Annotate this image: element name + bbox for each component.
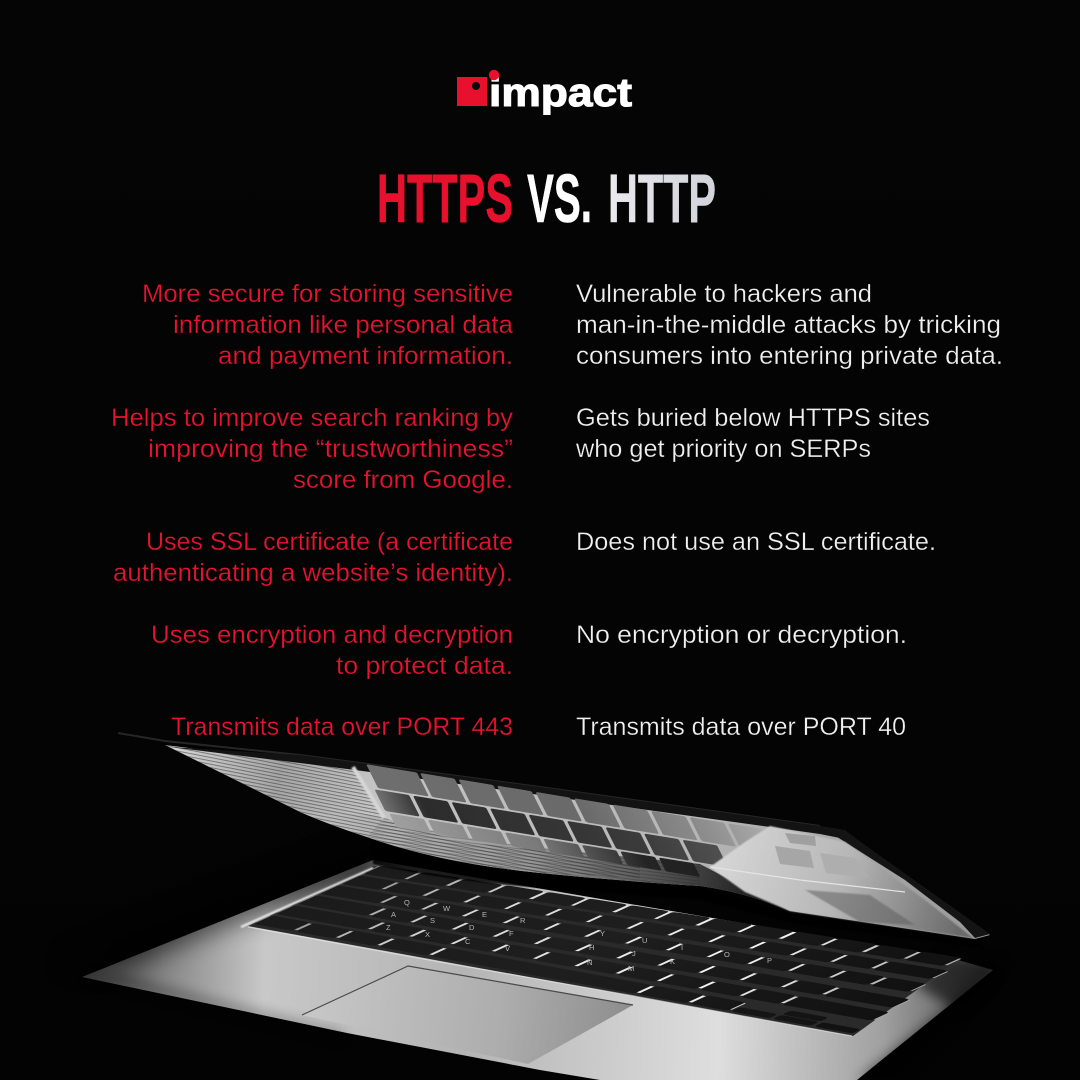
HTTP point: ranking: who get priority on SERPs: [575, 435, 871, 463]
key legends: X: [425, 930, 430, 939]
lid glare panel: [710, 826, 973, 938]
key legends: Q: [404, 898, 410, 907]
HTTP point: encryption: No encryption or decryption.: [576, 621, 907, 649]
HTTPS point: ranking: improving the “trustworthiness”: [148, 435, 513, 463]
shadow under lid: [372, 840, 985, 948]
HTTPS point: security: [142, 280, 513, 370]
key legends: Z: [386, 923, 391, 932]
laptop trackpad: [302, 966, 633, 1064]
HTTP point: port: Transmits data over PORT 40: [576, 713, 906, 741]
key row: numbers: [340, 875, 950, 979]
key row: QWERTY: [318, 885, 928, 992]
laptop base deck: [60, 845, 1005, 1080]
HTTPS point: ranking: [111, 404, 513, 494]
key legends: I: [681, 943, 683, 952]
lid lower lip reflection: [300, 812, 790, 911]
HTTPS point: SSL: Uses SSL certificate (a certificate: [146, 528, 513, 556]
logo wordmark: impact: [489, 71, 632, 115]
key legends: H: [589, 943, 594, 952]
HTTP point: vulnerability: man-in-the-middle attacks by tricking: [576, 311, 1001, 339]
column: HTTPS points: [111, 280, 513, 741]
lid stripes left: [165, 745, 640, 878]
key legends: N: [587, 958, 592, 967]
laptop photo illustration: [60, 733, 1005, 1080]
icon: red square with dot: [457, 77, 487, 106]
key row: space bar and arrows: [252, 915, 870, 1033]
HTTPS point: security: information like personal data: [173, 311, 513, 339]
lid surface: [165, 745, 990, 939]
HTTPS point: security: and payment information.: [218, 342, 513, 370]
key legends: C: [465, 937, 471, 946]
icon: red dot above i: [489, 70, 499, 80]
key legends: S: [430, 916, 435, 925]
title: HTTPS: HTTPS: [377, 160, 513, 237]
reflected key row 3: [389, 813, 700, 877]
HTTP point: ranking: [575, 404, 930, 463]
HTTPS point: ranking: Helps to improve search ranking by: [111, 404, 513, 432]
key legends: F: [509, 929, 514, 938]
key legends: [386, 898, 772, 973]
title: [377, 160, 716, 237]
HTTP point: ranking: Gets buried below HTTPS sites: [576, 404, 930, 432]
HTTPS point: encryption: [151, 621, 513, 680]
key legends: P: [767, 956, 772, 965]
lid side bezel: [820, 826, 990, 938]
HTTP point: SSL: Does not use an SSL certificate.: [576, 528, 936, 556]
HTTPS point: SSL: [113, 528, 513, 587]
HTTPS point: port: Transmits data over PORT 443: [171, 713, 513, 741]
key legends: K: [670, 957, 675, 966]
HTTPS point: security: More secure for storing sensitive: [142, 280, 513, 308]
key row: ZXCV: [274, 905, 891, 1021]
key legends: M: [628, 964, 634, 973]
key legends: A: [391, 910, 396, 919]
key legends: W: [443, 904, 451, 913]
title: VS.: VS.: [527, 160, 592, 237]
HTTPS point: SSL: authenticating a website’s identity).: [113, 559, 513, 587]
key row: function: [362, 865, 963, 966]
HTTP point: vulnerability: [576, 280, 1003, 370]
HTTP point: vulnerability: consumers into entering private data.: [576, 342, 1003, 370]
HTTPS point: encryption: Uses encryption and decryption: [151, 621, 513, 649]
reflected key row 2: [374, 789, 728, 867]
column: HTTP points: [575, 280, 1003, 741]
lid back edge: [118, 733, 820, 826]
HTTPS point: encryption: to protect data.: [336, 652, 513, 680]
lid keyboard reflection: [361, 763, 794, 892]
title: HTTP: HTTP: [608, 160, 716, 237]
lid stripes over lip: [367, 818, 700, 886]
HTTPS point: ranking: score from Google.: [293, 466, 513, 494]
HTTP point: vulnerability: Vulnerable to hackers and: [576, 280, 872, 308]
key legends: D: [469, 923, 475, 932]
logo: impact: [457, 70, 632, 115]
lid top bezel: [170, 747, 845, 838]
key legends: Y: [600, 929, 605, 938]
key legends: U: [642, 936, 647, 945]
lid gap highlight: [353, 767, 384, 818]
key legends: E: [482, 910, 487, 919]
keyboard well: [241, 866, 958, 1036]
key legends: O: [724, 950, 730, 959]
key legends: J: [632, 949, 636, 958]
key legends: V: [505, 944, 510, 953]
key row: ASDF: [296, 895, 912, 1008]
laptop screen lid: [118, 733, 990, 939]
reflected key row 1: [366, 764, 775, 853]
keyboard keys: [252, 865, 963, 1033]
key legends: R: [520, 916, 526, 925]
